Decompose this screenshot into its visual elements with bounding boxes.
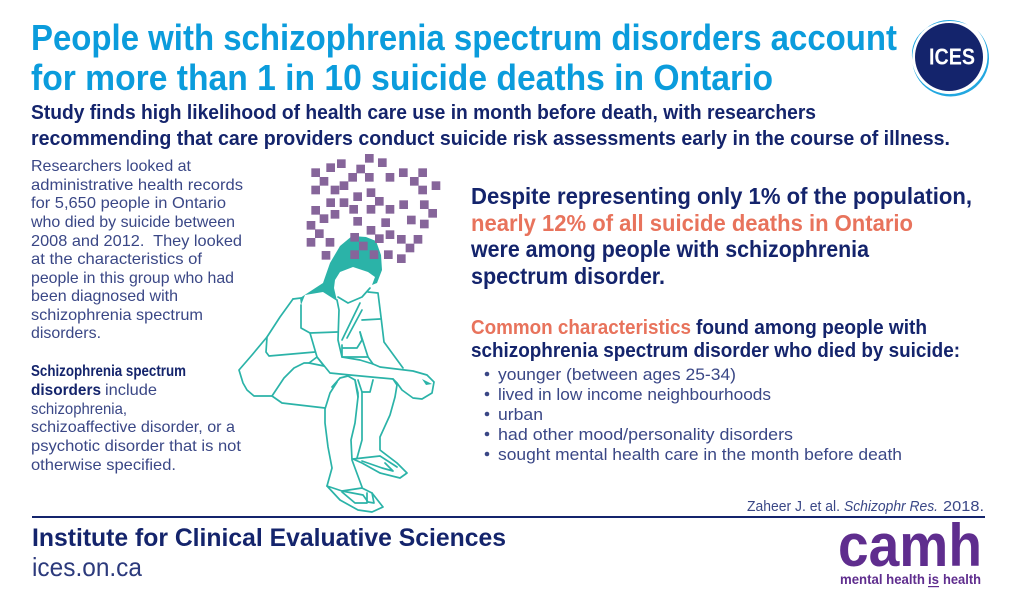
citation: Zaheer J. et al. [747,498,840,515]
footer: organisation name and URL: Institute for Clinical Evaluative Sciences [32,524,506,552]
hand detail [422,379,432,385]
subtitle: recommending that care providers conduct suicide risk assessments early in the course of illness. [31,128,950,150]
text block: study description [30,158,243,342]
title [31,17,897,98]
heading: common characteristics: Common characteristics [471,317,691,339]
citation: Schizophr Res. [844,498,938,515]
list: characteristics: younger (between ages 25-34) [498,365,736,384]
text block: definition: schizophrenia, [31,401,127,418]
logo: camh: is [928,571,939,587]
callout: key statistic: nearly 12% of all suicide deaths in Ontario [471,210,913,236]
text block: definition: schizoaffective disorder, or a [31,419,235,436]
citation: 2018. [943,498,984,515]
text block: definition: disorders [31,382,101,399]
heading: common characteristics: schizophrenia spectrum disorder who died by suicide: [471,340,960,362]
text block: definition: Schizophrenia spectrum [31,363,186,380]
logo: camh: health [943,571,981,587]
text block: study description: 2008 and 2012. They looked [31,233,242,250]
text block: study description: Researchers looked at [31,158,192,175]
footer: organisation name and URL: ices.on.ca [32,552,142,582]
text block: definition: psychotic disorder that is not [31,438,242,455]
text block: definition [31,363,242,474]
list: characteristics: had other mood/personality disorders [498,425,793,444]
text block: study description: been diagnosed with [31,288,178,305]
body outline [239,288,434,512]
footer: organisation name and URL [32,524,506,582]
heading: common characteristics [471,317,960,362]
subtitle: Study finds high likelihood of health care use in month before death, with researchers [31,102,816,124]
list: characteristics: lived in low income neighbourhoods [498,385,771,404]
icon: scattered purple squares [307,154,440,263]
callout: key statistic [470,183,972,289]
text block: study description: for 5,650 people in Ontario [31,195,226,212]
text block: study description: schizophrenia spectrum [31,307,203,324]
title: People with schizophrenia spectrum disorders account [31,17,897,58]
text block: study description: people in this group who had [31,270,234,287]
callout: key statistic: Despite representing only 1% of the population, [471,183,972,209]
text block: study description: who died by suicide between [30,214,235,231]
list: characteristics: sought mental health care in the month before death [498,445,902,464]
callout: key statistic: spectrum disorder. [471,263,665,289]
subtitle [31,102,950,150]
illustration: seated person [239,236,434,512]
icon: ICES logo: ICES [929,44,975,70]
citation [747,498,984,515]
list: characteristics [485,365,902,464]
heading: common characteristics: found among people with [696,317,927,339]
text block: study description: at the characteristics of [31,251,203,268]
text block: study description: disorders. [31,325,101,342]
text block: definition: otherwise specified. [31,457,176,474]
callout: key statistic: were among people with schizophrenia [470,236,869,262]
title: for more than 1 in 10 suicide deaths in Ontario [31,57,773,98]
logo: camh: camh [838,512,982,579]
hair [300,236,382,305]
list: characteristics: urban [498,405,543,424]
text block: definition: include [105,382,157,399]
icon: ICES logo [912,20,989,96]
logo: camh: mental health [840,571,925,587]
text block: study description: administrative health records [31,177,243,194]
